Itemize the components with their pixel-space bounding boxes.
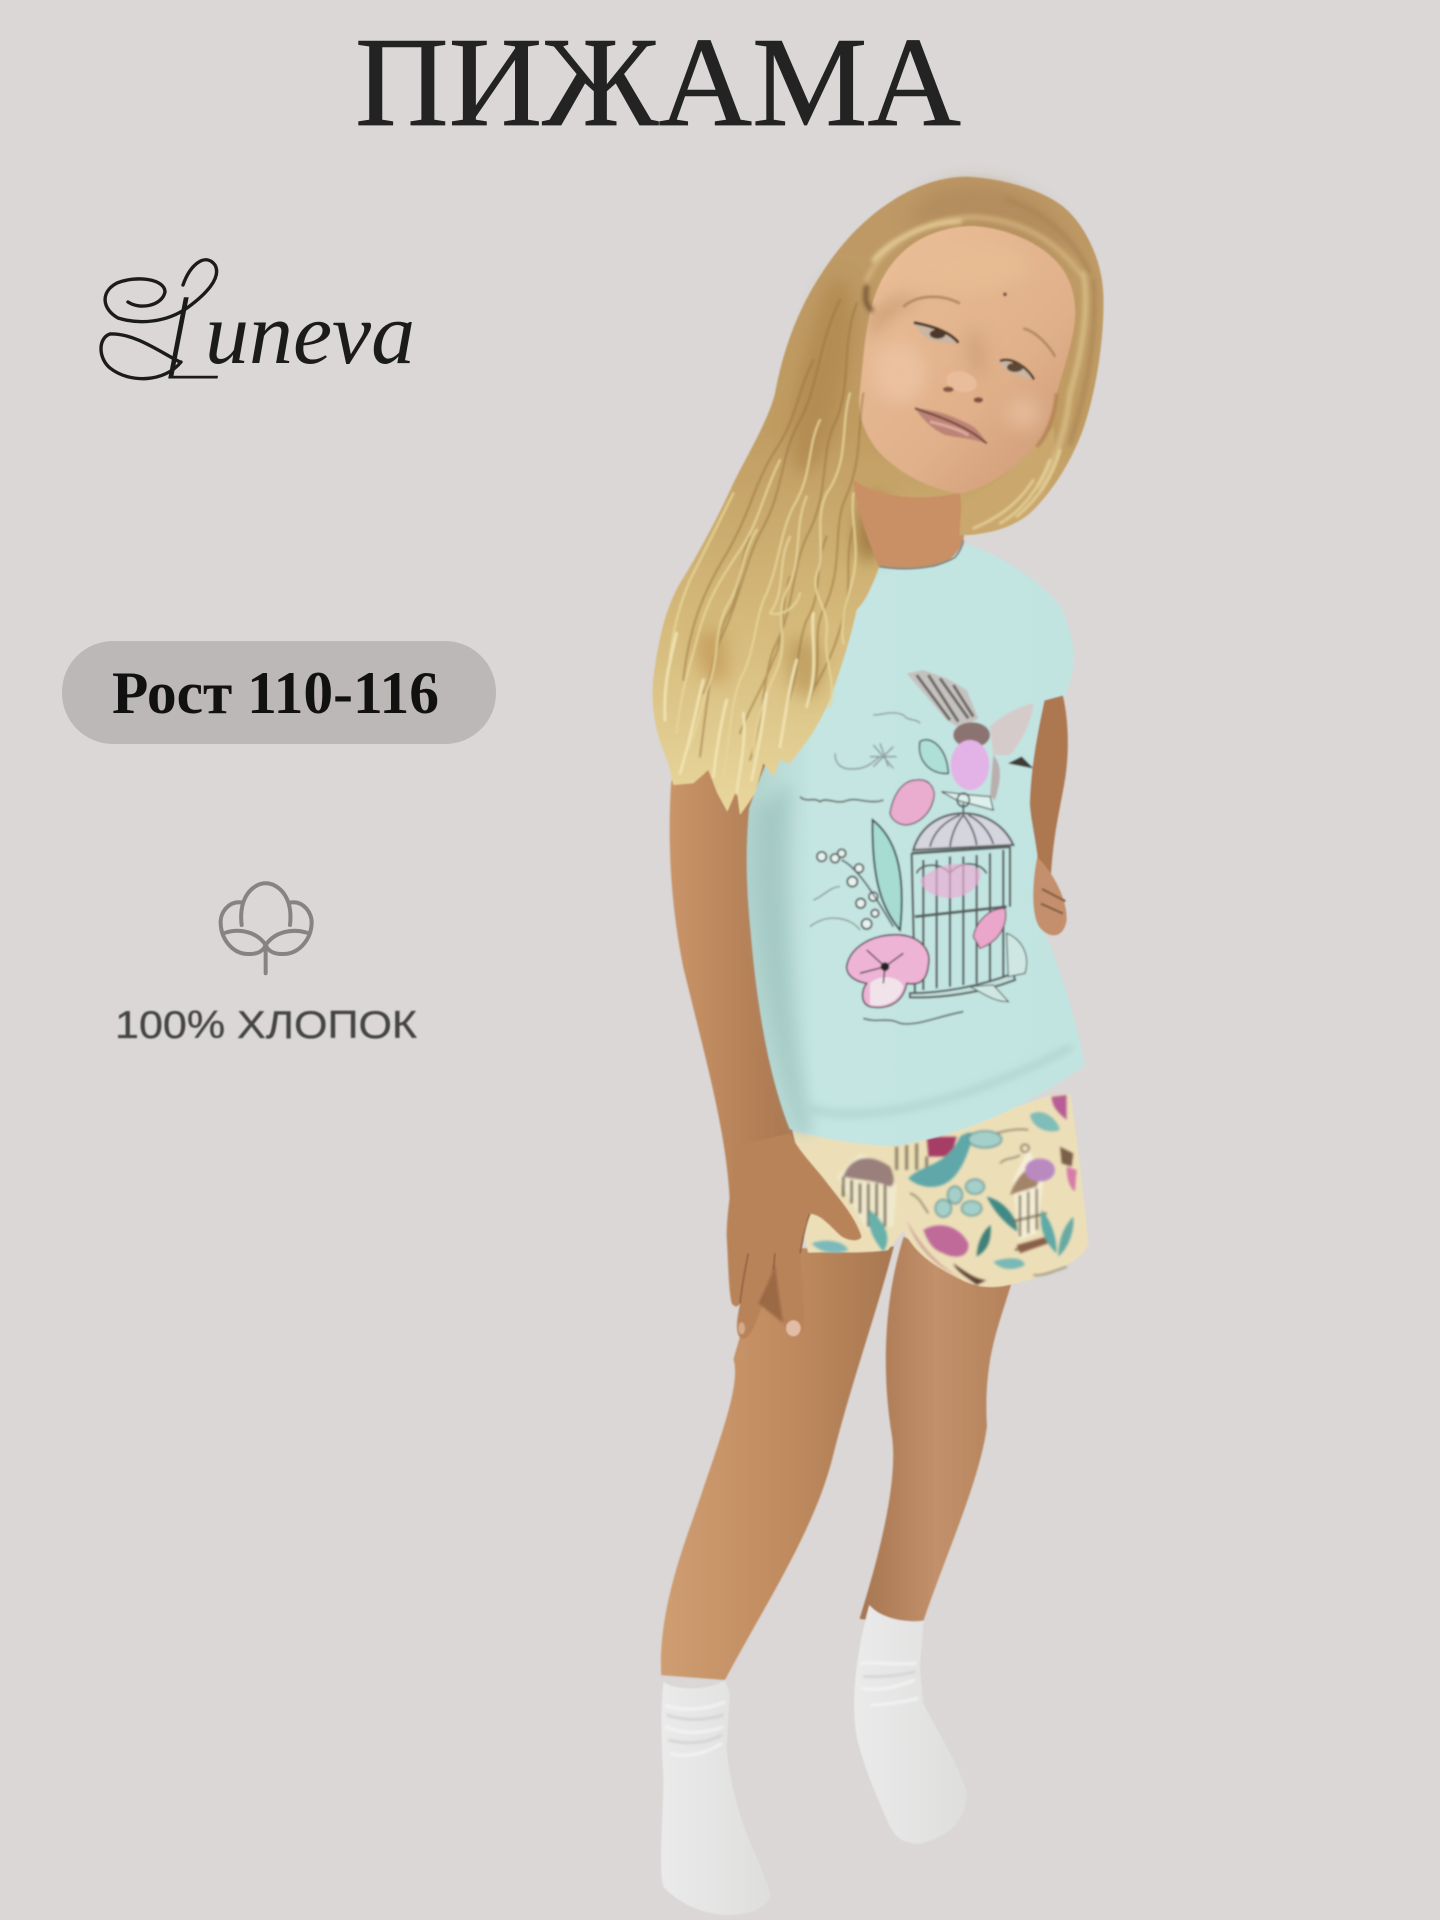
collar	[879, 540, 963, 569]
icon: cotton boll	[221, 883, 312, 973]
girl figure	[653, 177, 1103, 1915]
hairline and top strands	[866, 200, 1094, 487]
lower leaves	[970, 933, 1027, 1002]
small leaf	[919, 740, 948, 773]
t-shirt	[747, 544, 1085, 1146]
shorts print	[812, 1095, 1077, 1287]
hair mass	[653, 177, 1103, 815]
cage pink bloom	[920, 864, 981, 898]
shirt folds and shadow	[755, 784, 813, 1136]
brand logo: Luneva	[101, 260, 415, 410]
bird wing right	[990, 703, 1033, 755]
side flower	[973, 908, 1006, 948]
brand logo: Luneva: L	[160, 267, 231, 410]
socks	[661, 1605, 967, 1915]
facial features	[903, 293, 1055, 444]
face	[859, 226, 1075, 493]
head with hair	[653, 177, 1103, 815]
neck	[853, 480, 964, 568]
long hair strands	[665, 300, 863, 793]
front leg	[661, 1247, 894, 1680]
hand on hip	[1033, 857, 1067, 935]
large flower	[847, 935, 929, 1007]
cage	[910, 793, 1015, 997]
height badge	[62, 641, 496, 744]
right arm	[1030, 696, 1068, 884]
cotton label: 100% ХЛОПОК	[115, 1004, 417, 1047]
hair shading	[696, 183, 1073, 697]
title: ПИЖАМА	[355, 11, 961, 153]
brand logo: Luneva: uneva	[205, 286, 415, 383]
sock folds	[665, 1663, 918, 1755]
lily of the valley	[817, 849, 879, 929]
shorts	[793, 1093, 1089, 1287]
bird wing left	[907, 670, 978, 728]
shirt print: bird and cage	[800, 670, 1033, 1024]
light decorative sketch	[810, 713, 920, 930]
back sock	[854, 1605, 967, 1844]
face light and shade	[870, 243, 1040, 428]
tall leaf	[873, 820, 902, 930]
top flower	[890, 780, 934, 825]
bird body	[951, 740, 989, 790]
back leg	[860, 1237, 1011, 1629]
bird head	[953, 722, 990, 748]
right-side hair over neck	[959, 427, 1054, 535]
height badge: Рост 110-116	[112, 660, 439, 726]
ear shade	[1037, 393, 1057, 447]
left arm	[670, 722, 796, 1206]
hand on thigh	[727, 1133, 862, 1339]
front sock	[661, 1680, 771, 1915]
